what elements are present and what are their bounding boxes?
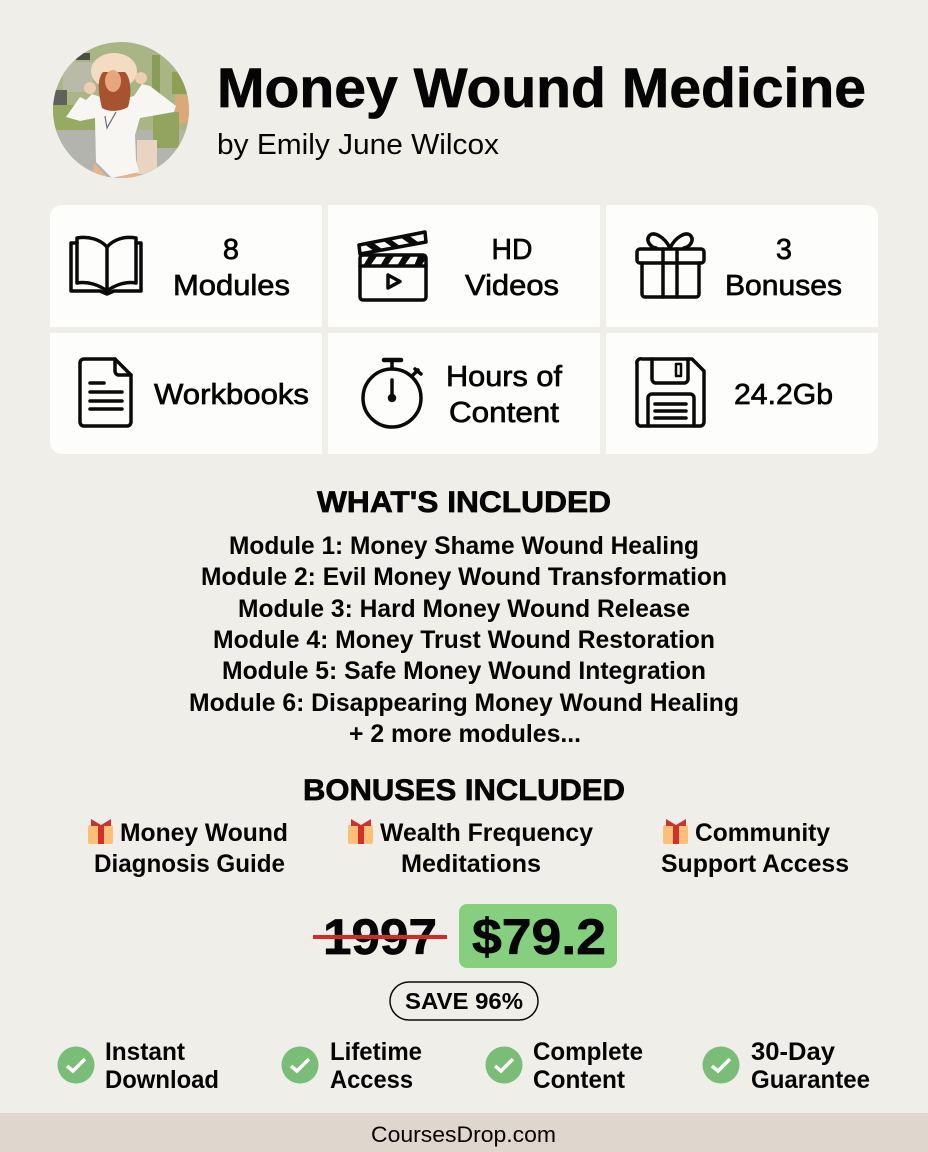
bonus: community support: Support Access: [661, 850, 849, 878]
cell: 8 modules: [50, 205, 322, 327]
footer bar: CoursesDrop.com: [371, 1122, 556, 1147]
feature: lifetime access: Lifetime: [330, 1038, 422, 1066]
feature: lifetime access: Access: [330, 1066, 413, 1094]
avatar photo: [53, 42, 189, 180]
stat text: 3 Bonuses: [725, 234, 842, 302]
bonus: wealth frequency meditations: [348, 819, 593, 878]
feature: 30-day guarantee: 30-Day: [751, 1038, 835, 1066]
subtitle: by Emily June Wilcox: [217, 129, 500, 161]
bonus: wealth frequency meditations: Meditations: [401, 850, 541, 878]
panel: course stats grid: [50, 205, 878, 454]
heading: bonuses included: BONUSES INCLUDED: [303, 774, 625, 807]
stat text: 8 Modules: 8: [223, 234, 239, 266]
icon: gift emoji: [663, 819, 688, 844]
save pill: SAVE 96%: [405, 988, 523, 1014]
new price badge: $79.2: [472, 909, 606, 965]
module list: Module 3: Hard Money Wound Release: [238, 595, 690, 623]
feature: 30-day guarantee: [702, 1038, 870, 1094]
icon: check: [58, 1046, 94, 1084]
footer bar: [0, 1113, 928, 1152]
feature: complete content: Content: [533, 1066, 626, 1094]
feature: instant download: Instant: [105, 1038, 186, 1066]
module list: Module 5: Safe Money Wound Integration: [222, 657, 706, 685]
feature: instant download: Download: [105, 1066, 219, 1094]
feature: complete content: [486, 1038, 643, 1094]
icon: floppy disk: [637, 359, 704, 426]
icon: check: [486, 1046, 522, 1084]
stat text: 3 Bonuses: 3: [776, 234, 792, 266]
stat text: 3 Bonuses: Bonuses: [725, 270, 842, 302]
stat text: HD Videos: Videos: [465, 270, 559, 302]
icon: gift emoji: [348, 819, 373, 844]
feature: lifetime access: [282, 1038, 422, 1094]
feature: instant download: [58, 1038, 219, 1094]
icon: gift emoji: [88, 819, 113, 844]
stat text: Workbooks: Workbooks: [154, 379, 309, 411]
bonus: diagnosis guide: Money Wound: [120, 819, 288, 847]
feature: 30-day guarantee: Guarantee: [751, 1066, 870, 1094]
icon: document: [80, 359, 131, 426]
bonus: wealth frequency meditations: Wealth Frequency: [380, 819, 593, 847]
bonus: community support: Community: [695, 819, 830, 847]
icon: clapperboard: [359, 232, 426, 300]
title: Money Wound Medicine: [217, 56, 866, 119]
module list: + 2 more modules...: [349, 720, 581, 748]
stat text: HD Videos: [465, 234, 559, 302]
cell: 3 bonuses: [606, 205, 878, 327]
module list: Module 1: Money Shame Wound Healing: [229, 532, 699, 560]
stat text: 24.2Gb: 24.2Gb: [734, 379, 833, 411]
bonus: diagnosis guide: [88, 819, 288, 878]
cell: workbooks: [50, 333, 322, 454]
feature: complete content: Complete: [533, 1038, 643, 1066]
icon: stopwatch: [363, 360, 421, 427]
new price badge: [459, 904, 617, 968]
cell: HD videos: [328, 205, 600, 327]
stat text: HD Videos: HD: [492, 234, 532, 266]
module list: Module 6: Disappearing Money Wound Healing: [189, 689, 739, 717]
module list: [189, 532, 739, 748]
save pill: [390, 982, 538, 1020]
heading: what's included: WHAT'S INCLUDED: [317, 486, 611, 519]
stat text: Hours of Content: Content: [449, 397, 559, 429]
cell: file size: [606, 333, 878, 454]
icon: open book: [71, 237, 141, 294]
stat text: 8 Modules: Modules: [173, 270, 290, 302]
icon: gift box: [637, 234, 704, 297]
stat text: 8 Modules: [173, 234, 290, 302]
icon: check: [702, 1046, 740, 1084]
stat text: Hours of Content: Hours of: [446, 361, 563, 393]
icon: check: [282, 1046, 318, 1084]
bonus: diagnosis guide: Diagnosis Guide: [94, 850, 285, 878]
module list: Module 2: Evil Money Wound Transformation: [201, 563, 727, 591]
bonus: community support: [661, 819, 849, 878]
module list: Module 4: Money Trust Wound Restoration: [213, 626, 715, 654]
cell: hours of content: [328, 333, 600, 454]
old price struck through: 1997: [323, 909, 437, 965]
stat text: Hours of Content: [446, 361, 563, 429]
